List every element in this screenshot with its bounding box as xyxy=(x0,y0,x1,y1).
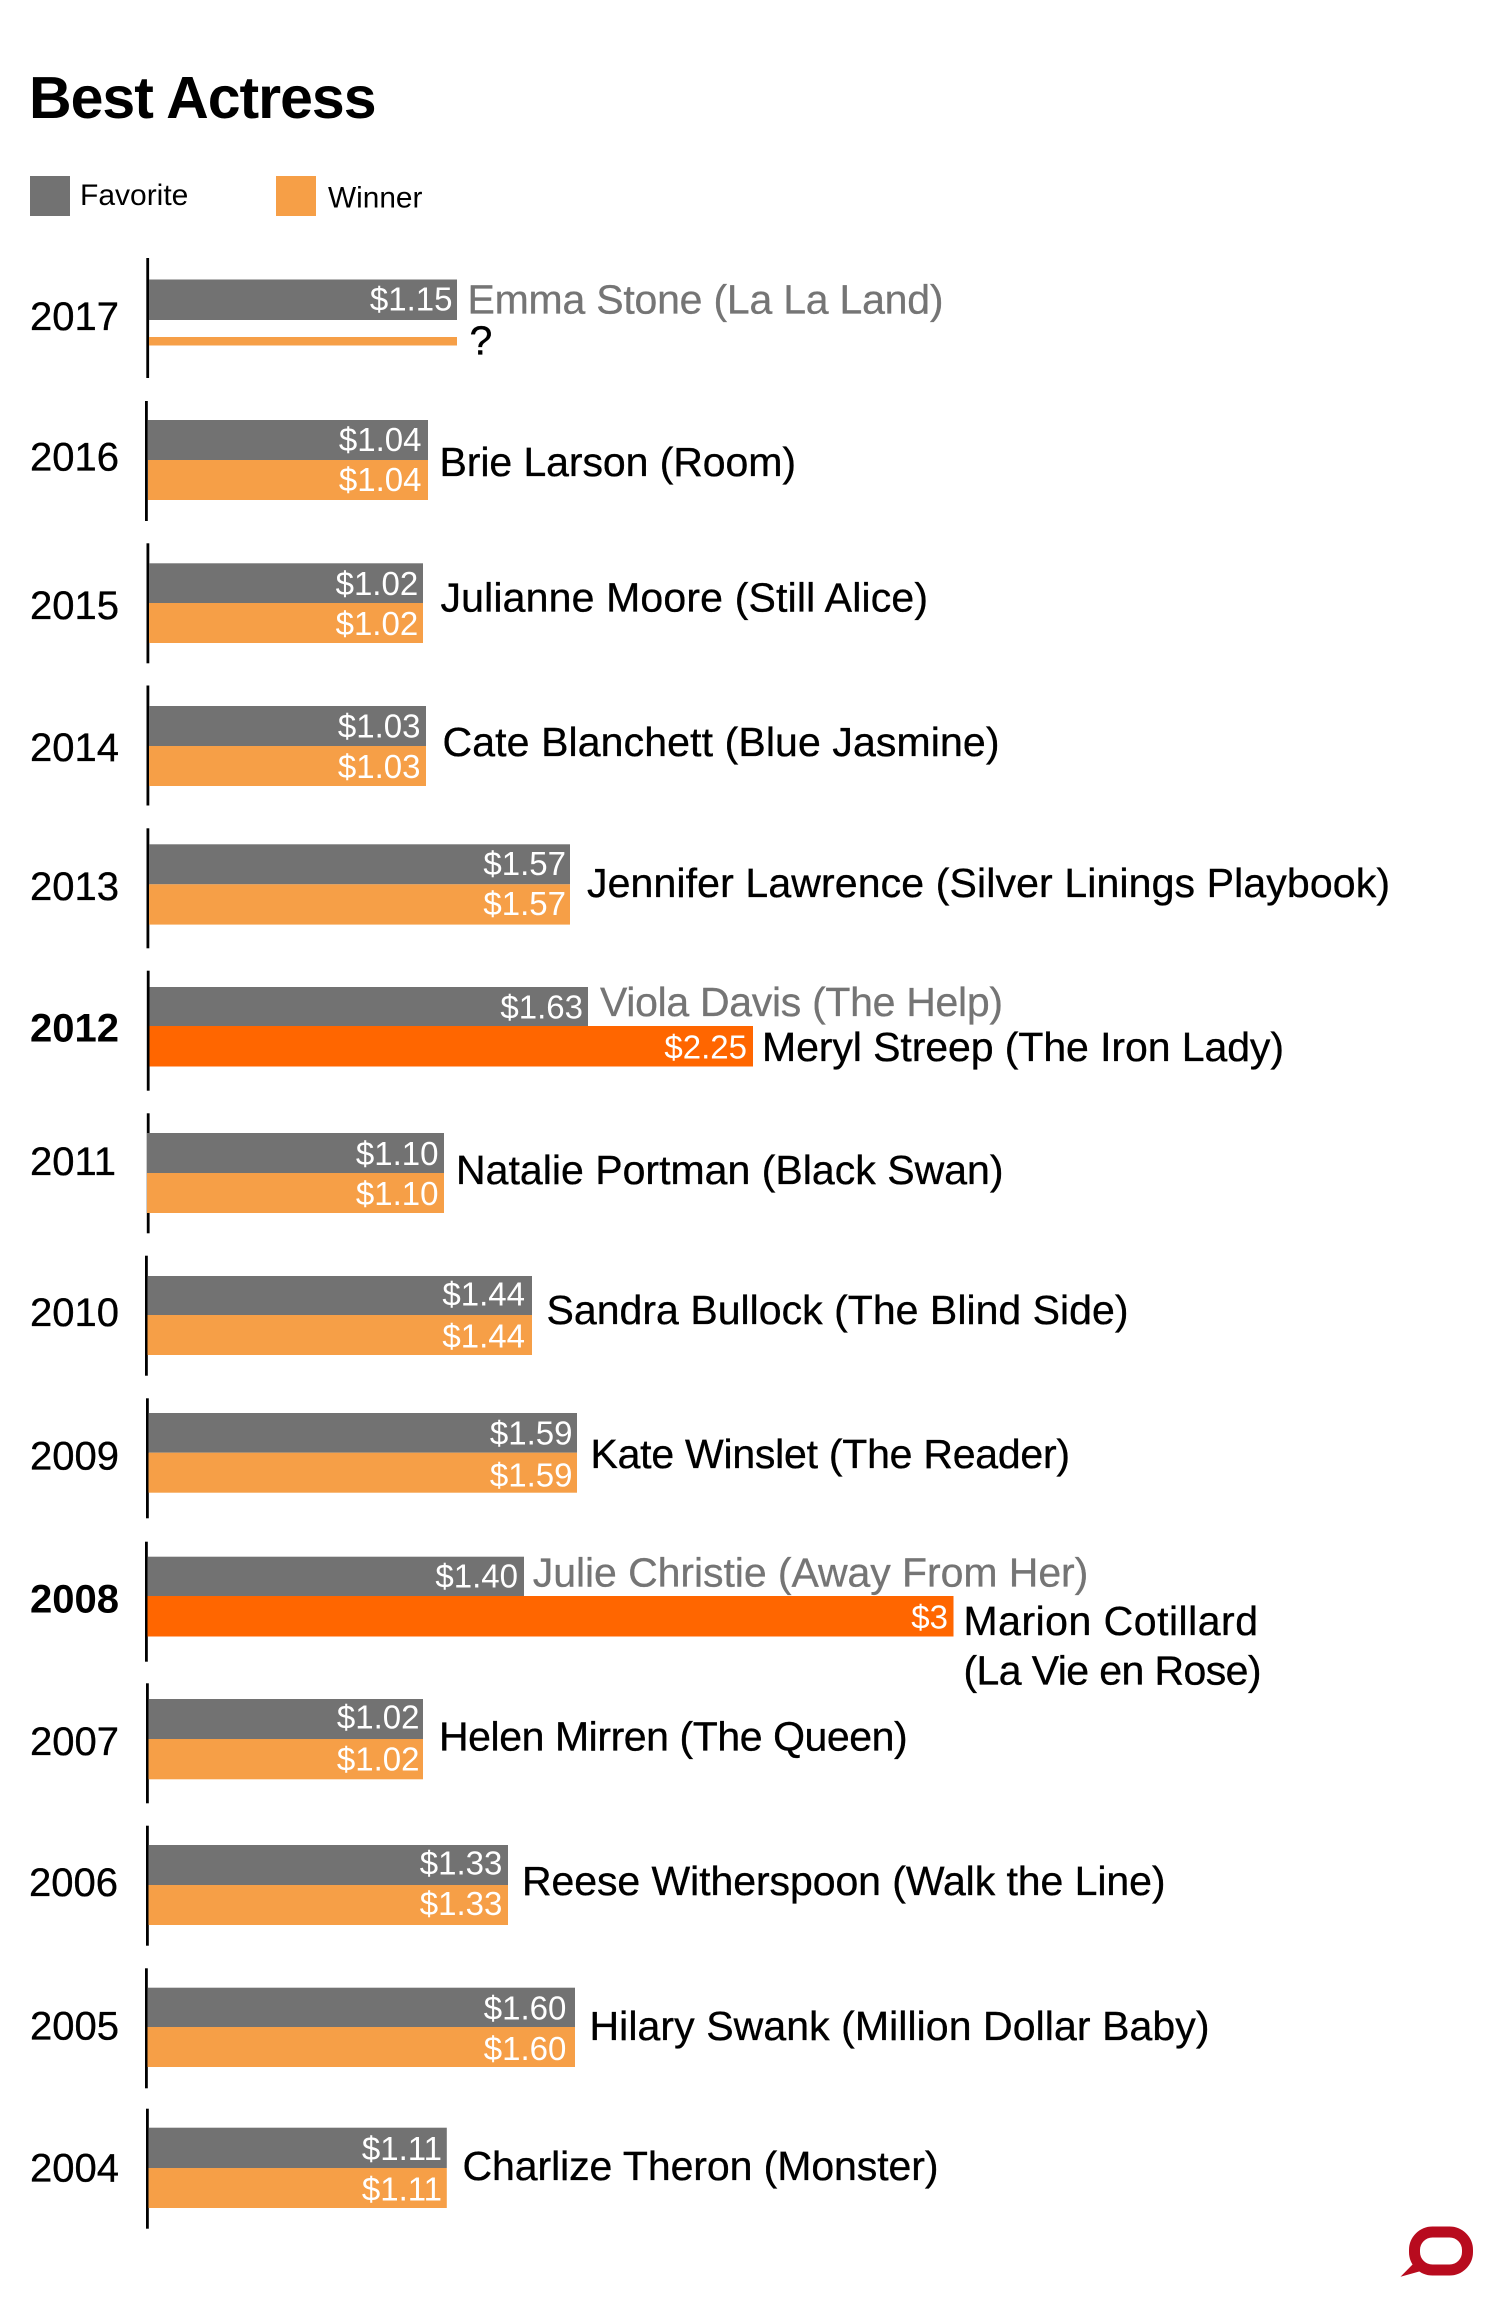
row: 2004: Charlize Theron (Monster) xyxy=(462,2143,938,2189)
row: 2017: 2017 xyxy=(30,295,119,339)
row: 2007: $1.02 xyxy=(337,1698,420,1735)
row: 2016: 2016 xyxy=(30,436,119,480)
row: 2011: $1.10 xyxy=(356,1135,438,1172)
winner bar 2013 xyxy=(149,884,570,925)
row: 2004: 2004 xyxy=(30,2147,119,2191)
row: 2015: 2015 xyxy=(30,584,119,628)
row: 2009: $1.59 xyxy=(490,1457,572,1494)
favorite bar 2007 xyxy=(148,1699,423,1739)
row: 2006: $1.33 xyxy=(420,1844,502,1881)
row: 2005: Hilary Swank (Million Dollar Baby) xyxy=(590,2003,1210,2049)
row: 2008 xyxy=(30,1542,1262,1693)
winner bar 2016 xyxy=(148,460,428,500)
row: 2005 xyxy=(30,1968,1210,2088)
row: 2012: 2012 xyxy=(30,1007,119,1051)
row: 2008: Julie Christie (Away From Her) xyxy=(533,1550,1088,1596)
winner bar 2015 xyxy=(149,603,423,643)
row: 2016: $1.04 xyxy=(339,461,422,498)
row: 2011: 2011 xyxy=(30,1140,116,1184)
legend xyxy=(30,176,422,216)
row: 2012: $1.63 xyxy=(500,988,583,1025)
row: 2010: $1.44 xyxy=(442,1276,525,1313)
favorite bar 2011 xyxy=(147,1133,444,1173)
row: 2007: Helen Mirren (The Queen) xyxy=(439,1714,908,1760)
favorite bar 2017 xyxy=(149,280,457,320)
legend label: favorite: Favorite xyxy=(80,179,188,212)
row: 2014: $1.03 xyxy=(338,708,420,744)
row: 2010 xyxy=(30,1256,1128,1376)
row: 2004 xyxy=(30,2109,938,2229)
row: 2017: $1.15 xyxy=(370,280,452,318)
row: 2013: Jennifer Lawrence (Silver Linings Playbook) xyxy=(587,860,1390,906)
row: 2007: 2007 xyxy=(30,1720,119,1764)
row: 2014: Cate Blanchett (Blue Jasmine) xyxy=(442,719,1000,765)
winner bar 2011 xyxy=(147,1173,444,1213)
winner bar 2008 xyxy=(148,1596,954,1636)
row: 2009 xyxy=(30,1398,1070,1518)
winner name 2008: Marion Cotillard xyxy=(964,1598,1258,1644)
row: 2008: $1.40 xyxy=(435,1558,518,1595)
legend swatch: favorite xyxy=(30,176,70,216)
row: 2006: 2006 xyxy=(29,1861,118,1905)
row: 2014: $1.03 xyxy=(338,748,420,785)
row: 2012 xyxy=(30,971,1284,1091)
winner bar 2006 xyxy=(148,1885,508,1925)
row: 2005: $1.60 xyxy=(484,1989,566,2026)
winner name 2008: (La Vie en Rose) xyxy=(964,1647,1262,1693)
favorite bar 2015 xyxy=(149,563,423,603)
row: 2013 xyxy=(30,828,1390,948)
favorite bar 2005 xyxy=(148,1988,575,2027)
row: 2008: 2008 xyxy=(30,1577,119,1621)
winner bar 2007 xyxy=(148,1739,423,1779)
row: 2007 xyxy=(30,1683,908,1803)
winner bar 2009 xyxy=(148,1453,577,1493)
legend label: winner: Winner xyxy=(328,182,422,214)
row: 2016 xyxy=(30,401,796,521)
row: 2016: $1.04 xyxy=(339,421,422,458)
row: 2011: $1.10 xyxy=(356,1175,438,1212)
row: 2007: $1.02 xyxy=(337,1741,420,1778)
row: 2017 xyxy=(30,258,944,378)
favorite bar 2006 xyxy=(148,1845,508,1885)
row: 2005: $1.60 xyxy=(484,2030,566,2067)
row: 2004: $1.11 xyxy=(362,2130,442,2167)
winner name 2008 xyxy=(964,1598,1262,1693)
favorite bar 2016 xyxy=(148,420,428,460)
row: 2013: $1.57 xyxy=(483,885,566,922)
row: 2011: Natalie Portman (Black Swan) xyxy=(456,1147,1004,1193)
icon: speech bubble logo xyxy=(1400,2232,1468,2277)
winner bar 2017 (undecided) xyxy=(149,337,457,346)
row: 2010: Sandra Bullock (The Blind Side) xyxy=(546,1287,1128,1333)
row: 2012: Meryl Streep (The Iron Lady) xyxy=(762,1024,1284,1070)
favorite bar 2009 xyxy=(148,1413,577,1453)
favorite bar 2004 xyxy=(148,2128,447,2168)
winner bar 2012 xyxy=(150,1026,753,1066)
favorite bar 2010 xyxy=(148,1276,532,1315)
title: Best Actress xyxy=(29,65,376,131)
row: 2013: $1.57 xyxy=(483,845,566,882)
row: 2009: 2009 xyxy=(30,1434,119,1478)
row: 2006 xyxy=(29,1826,1166,1946)
row: 2010: 2010 xyxy=(30,1291,119,1335)
row: 2015: $1.02 xyxy=(336,605,418,642)
row: 2008: $3 xyxy=(911,1598,948,1635)
row: 2009: Kate Winslet (The Reader) xyxy=(590,1431,1070,1477)
row: 2017: Emma Stone (La La Land) xyxy=(468,277,944,323)
winner bar 2010 xyxy=(148,1315,532,1355)
winner bar 2004 xyxy=(148,2168,447,2208)
row: 2012: $2.25 xyxy=(664,1028,747,1065)
favorite bar 2014 xyxy=(149,706,426,746)
row: 2006: Reese Witherspoon (Walk the Line) xyxy=(522,1858,1166,1904)
row: 2005: 2005 xyxy=(30,2004,119,2048)
row: 2011 xyxy=(30,1113,1004,1233)
row: 2006: $1.33 xyxy=(420,1885,502,1922)
row: 2017: ? xyxy=(470,317,492,363)
favorite bar 2013 xyxy=(149,844,570,884)
row: 2009: $1.59 xyxy=(490,1414,572,1451)
row: 2015: $1.02 xyxy=(336,565,418,602)
row: 2004: $1.11 xyxy=(362,2171,442,2208)
row: 2016: Brie Larson (Room) xyxy=(440,439,796,485)
row: 2014 xyxy=(30,686,1000,806)
winner bar 2014 xyxy=(149,746,426,786)
legend swatch: winner xyxy=(276,176,316,216)
favorite bar 2012 xyxy=(150,987,588,1026)
favorite bar 2008 xyxy=(148,1557,524,1596)
row: 2015: Julianne Moore (Still Alice) xyxy=(440,575,928,621)
row: 2014: 2014 xyxy=(30,726,119,770)
row: 2010: $1.44 xyxy=(442,1317,525,1354)
row: 2013: 2013 xyxy=(30,865,119,909)
row: 2015 xyxy=(30,543,928,663)
row: 2012: Viola Davis (The Help) xyxy=(600,979,1003,1025)
winner bar 2005 xyxy=(148,2027,575,2067)
